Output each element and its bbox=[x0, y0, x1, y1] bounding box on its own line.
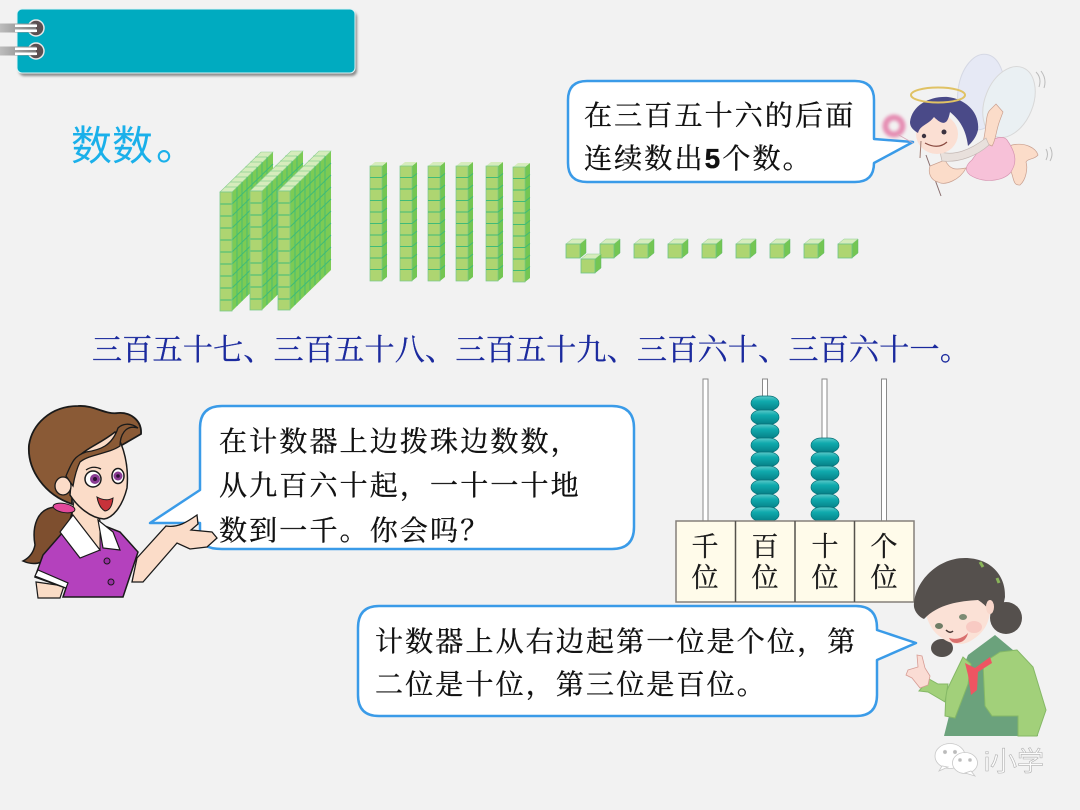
jacket right bbox=[983, 650, 1046, 736]
place labels: 千 bbox=[692, 532, 718, 562]
feather collar bbox=[940, 138, 989, 161]
bubble text: 在三百五十六的后面 bbox=[584, 100, 855, 132]
hand bbox=[906, 655, 930, 688]
sleeve band bbox=[35, 570, 68, 588]
hair clips bbox=[980, 562, 999, 583]
answer line: 三百五十七、三百五十八、三百五十九、三百六十、三百六十一。 bbox=[92, 334, 970, 367]
place labels bbox=[692, 532, 898, 593]
binder ring top bbox=[0, 20, 44, 36]
jacket left bbox=[945, 657, 971, 718]
face bbox=[916, 114, 958, 154]
hundred plates bbox=[220, 151, 331, 311]
rods bbox=[703, 379, 886, 521]
bubble text line 2: 二位是十位，第三位是百位。 bbox=[375, 669, 767, 701]
fringe bbox=[66, 424, 138, 486]
wechat icon bbox=[935, 744, 978, 776]
face bbox=[925, 595, 990, 644]
ear bbox=[986, 600, 994, 614]
halo bbox=[911, 88, 965, 102]
eyes bbox=[85, 467, 124, 487]
scarf bbox=[965, 657, 992, 695]
fairy face details bbox=[925, 142, 947, 146]
bubble text line 3: 数到一千。你会吗？ bbox=[219, 515, 490, 547]
neck bbox=[72, 500, 100, 550]
unit cubes bbox=[566, 239, 858, 273]
watermark text: i小学 bbox=[984, 747, 1044, 777]
header banner bbox=[0, 9, 357, 76]
ten rods bbox=[370, 162, 530, 282]
hair bbox=[914, 558, 1005, 622]
buttons bbox=[104, 558, 110, 564]
dress bbox=[944, 635, 1038, 736]
watermark bbox=[935, 744, 1044, 777]
heading: counting: 数数。 bbox=[71, 123, 197, 169]
speech bubble: fairy bbox=[568, 81, 913, 182]
wand tip bbox=[886, 118, 902, 134]
place labels: 位 bbox=[812, 563, 838, 593]
hair bbox=[910, 97, 978, 146]
girl character bbox=[906, 558, 1046, 736]
left arm bbox=[36, 582, 64, 598]
hundreds beads bbox=[751, 396, 779, 522]
shirt bbox=[35, 522, 138, 597]
face bbox=[70, 432, 127, 519]
teacher character bbox=[23, 406, 217, 598]
sleeve bbox=[919, 679, 948, 702]
speech bubble: teacher bbox=[150, 406, 634, 549]
abacus bbox=[676, 379, 914, 602]
place labels: 个 bbox=[870, 532, 898, 562]
ear bbox=[55, 477, 71, 495]
arms bbox=[983, 104, 1003, 146]
mouth bbox=[97, 497, 113, 511]
collar bbox=[60, 515, 100, 558]
right arm and hand bbox=[132, 515, 217, 582]
binder ring bottom bbox=[0, 43, 44, 59]
fairy character bbox=[886, 51, 1052, 196]
place labels: 位 bbox=[692, 563, 718, 593]
speech bubble: girl bbox=[358, 606, 916, 716]
tens beads bbox=[811, 438, 839, 522]
bubble text line 2: 连续数出5个数。 bbox=[584, 143, 813, 175]
place labels: 位 bbox=[752, 563, 778, 593]
ponytail bbox=[23, 507, 72, 563]
wings bbox=[953, 51, 1052, 161]
place labels: 百 bbox=[752, 532, 778, 562]
place labels: 十 bbox=[812, 532, 838, 562]
facial features bbox=[935, 614, 982, 643]
bubble text line 1: 在计数器上边拨珠边数数， bbox=[219, 426, 581, 458]
hair back bbox=[29, 406, 141, 504]
bubble text line 2: 从九百六十起，一十一十地 bbox=[219, 470, 581, 502]
legs and body bbox=[990, 144, 1038, 185]
place labels: 位 bbox=[870, 563, 898, 593]
back hair buns bbox=[990, 602, 1022, 634]
bubble text line 1: 计数器上从右边起第一位是个位，第 bbox=[375, 626, 857, 658]
hair band bbox=[52, 502, 76, 514]
base bbox=[676, 521, 914, 602]
